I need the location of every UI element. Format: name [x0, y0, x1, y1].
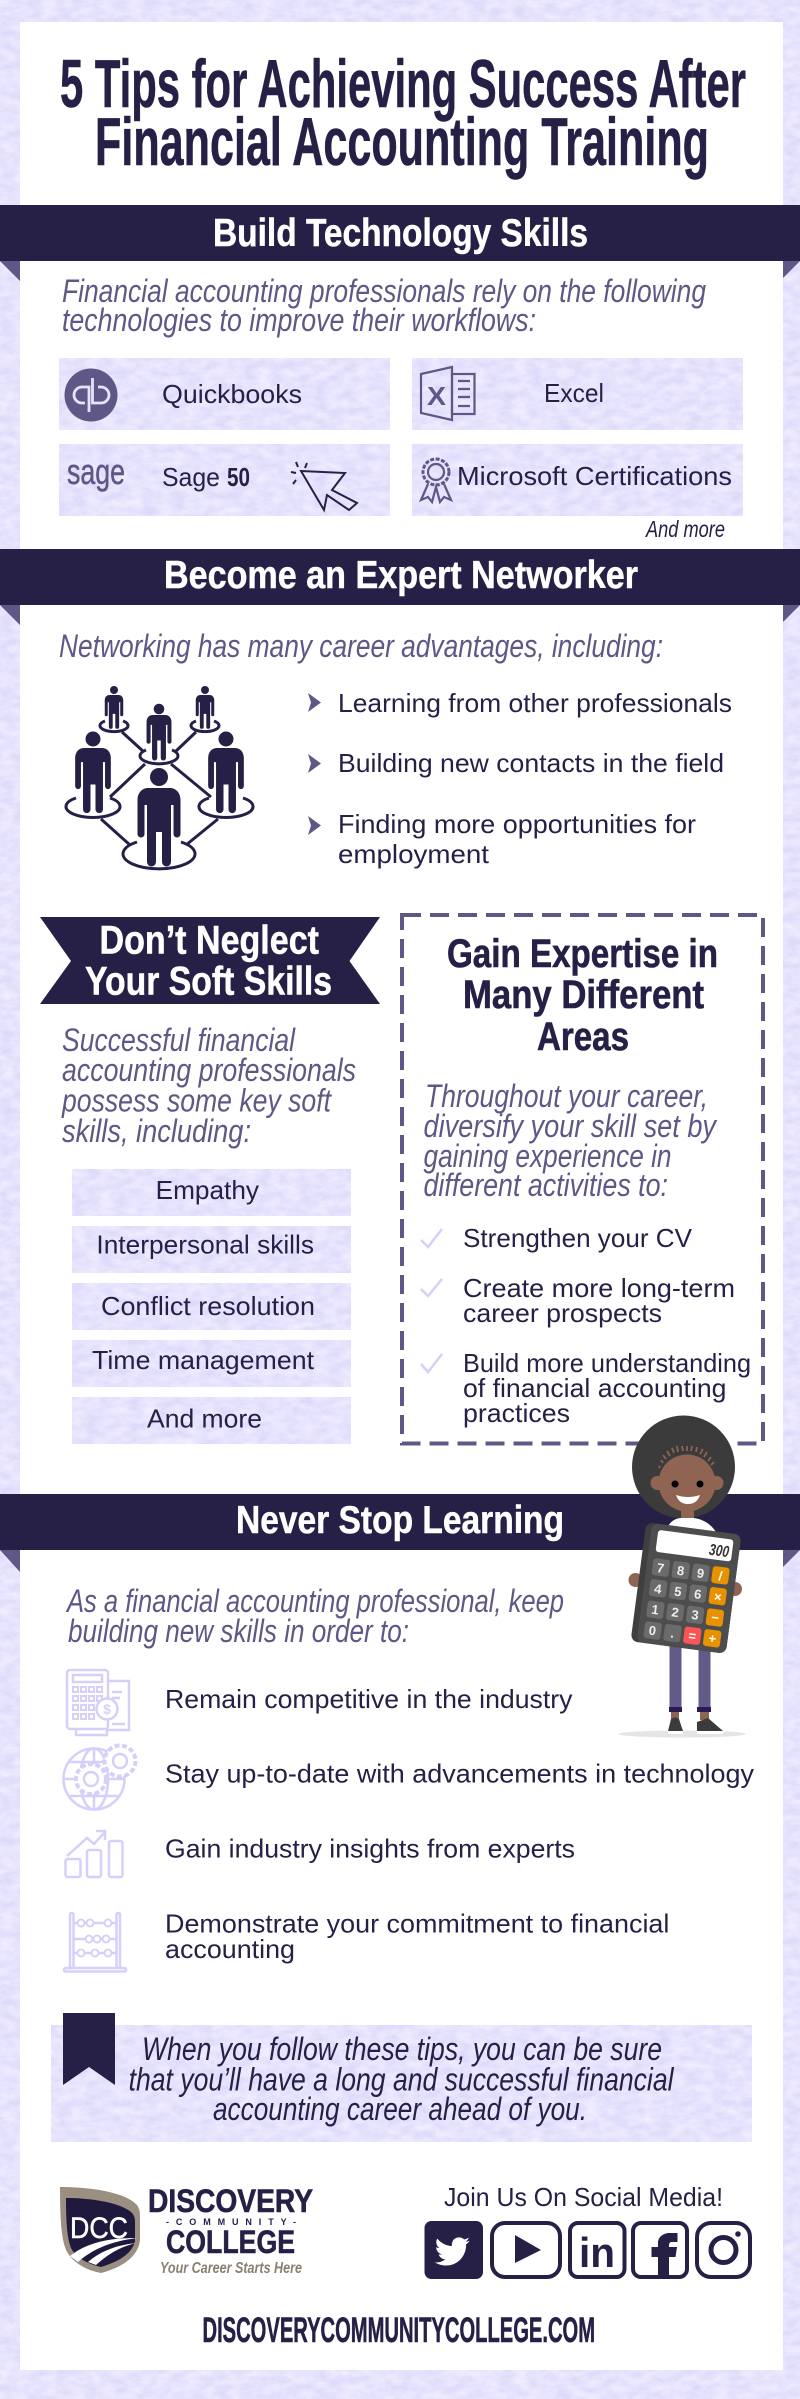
illustration: woman holding calculator: 8: [676, 1563, 685, 1579]
intro: technologies: [62, 273, 706, 338]
intro: soft skills: Successful financial: [62, 1022, 296, 1058]
soft skills chips: [72, 1169, 351, 1444]
card: Sage 50: Sage: [162, 462, 220, 492]
illustration: woman holding calculator: .: [670, 1625, 675, 1641]
text: demonstrate commitment: [165, 1908, 669, 1964]
intro: keep learning: building new skills in order to:: [68, 1613, 409, 1649]
intro: soft skills: possess some key soft: [61, 1082, 332, 1118]
illustration: woman holding calculator: 1: [651, 1602, 660, 1618]
intro: keep learning: [65, 1583, 564, 1649]
text: demonstrate commitment: Demonstrate your commitment to financial: [165, 1908, 669, 1938]
intro: keep learning: As a financial accounting professional, keep: [65, 1583, 564, 1619]
heading: expertise: Areas: [537, 1015, 629, 1059]
illustration: woman holding calculator: 4: [653, 1581, 663, 1597]
ribbon heading: soft skills: Don’t Neglect: [100, 918, 319, 962]
expertise checklist: practices: [463, 1398, 570, 1428]
card: Excel: [412, 358, 743, 430]
intro: expertise: gaining experience in: [424, 1138, 672, 1174]
intro: soft skills: [61, 1022, 356, 1149]
callout: conclusion: accounting career ahead of you.: [213, 2091, 587, 2127]
callout: conclusion: [51, 2013, 752, 2142]
text: remain competitive: Remain competitive in the industry: [165, 1684, 572, 1714]
soft skills chips: And more: [147, 1404, 262, 1434]
expertise checklist: career prospects: [463, 1298, 662, 1328]
illustration: woman holding calculator: +: [708, 1630, 717, 1646]
banner: Become an Expert Networker: Become an Expert Networker: [164, 554, 638, 597]
networking advantages list: employment: [338, 839, 490, 869]
networking advantages list: Learning from other professionals: [338, 688, 732, 718]
expertise checklist: Build more understanding: [463, 1348, 751, 1378]
dashed panel: expertise: [402, 915, 763, 1444]
heading: expertise: Gain Expertise in: [447, 932, 718, 976]
illustration: woman holding calculator: 9: [696, 1565, 705, 1581]
card: Quickbooks: [59, 358, 390, 430]
intro: expertise: [424, 1078, 718, 1203]
card: Sage 50: 50: [227, 462, 250, 492]
icon: instagram: [697, 2223, 750, 2277]
text: stay up to date: Stay up-to-date with advancements in technology: [165, 1758, 754, 1788]
soft skills chips: Time management: [92, 1345, 315, 1375]
networking advantages list: Building new contacts in the field: [338, 748, 724, 778]
ribbon heading: soft skills: Your Soft Skills: [85, 960, 332, 1004]
banner: Never Stop Learning: [0, 1494, 800, 1572]
logo: Discovery Community College: -COMMUNITY-: [166, 2217, 296, 2227]
callout: conclusion: that you’ll have a long and successful financial: [129, 2062, 674, 2098]
ribbon heading: soft skills: [40, 917, 380, 1004]
expertise checklist: of financial accounting: [463, 1373, 726, 1403]
card: Excel: Excel: [544, 378, 604, 408]
illustration: woman holding calculator: 7: [656, 1560, 665, 1576]
note: And more: And more: [644, 516, 725, 542]
banner: Become an Expert Networker: [0, 549, 800, 625]
icon: calculator and invoice: [67, 1670, 129, 1735]
intro: networking: Networking has many career advantages, including:: [59, 628, 663, 664]
networking advantages list: [308, 688, 732, 869]
logo: Discovery Community College: Your Career Starts Here: [160, 2260, 302, 2277]
expertise checklist: [421, 1223, 751, 1428]
text: gain insights: Gain industry insights from experts: [165, 1834, 575, 1864]
intro: soft skills: skills, including:: [62, 1113, 251, 1149]
logo: Discovery Community College: DISCOVERY: [148, 2183, 313, 2219]
illustration: woman holding calculator: /: [718, 1568, 724, 1584]
text: demonstrate commitment: accounting: [165, 1934, 295, 1964]
intro: technologies: technologies to improve their workflows:: [62, 302, 536, 338]
icon: calculator and invoice: $: [103, 1701, 111, 1717]
soft skills chips: Conflict resolution: [101, 1291, 315, 1321]
icon: facebook: [633, 2223, 687, 2278]
intro: expertise: different activities to:: [424, 1167, 668, 1203]
card: Sage 50: sage: [67, 451, 125, 492]
illustration: woman holding calculator: =: [688, 1628, 697, 1644]
illustration: woman holding calculator: 300: [708, 1542, 730, 1561]
icon: linkedin: [570, 2223, 624, 2277]
networking advantages list: Finding more opportunities for: [338, 809, 696, 839]
card: Microsoft Certifications: Microsoft Certifications: [457, 461, 732, 491]
card: Sage 50: [59, 444, 390, 516]
soft skills chips: Interpersonal skills: [96, 1230, 314, 1260]
expertise checklist: Create more long-term: [463, 1273, 735, 1303]
social icons: [424, 2221, 750, 2279]
illustration: woman holding calculator: 5: [673, 1584, 682, 1599]
logo: Discovery Community College: COLLEGE: [166, 2224, 295, 2260]
intro: expertise: diversify your skill set by: [424, 1108, 718, 1144]
icon: globe and gears: [64, 1746, 136, 1810]
social heading: Join Us On Social Media!: [444, 2182, 723, 2212]
icon: linkedin: in: [579, 2229, 615, 2276]
icon: twitter: [424, 2221, 483, 2279]
illustration: woman holding calculator: ×: [713, 1589, 723, 1605]
card: Excel: X: [427, 381, 447, 411]
title: [60, 46, 746, 180]
icon: people network: [66, 686, 253, 869]
banner: Build Technology Skills: Build Technology Skills: [213, 212, 588, 255]
illustration: woman holding calculator: 0: [648, 1623, 657, 1638]
icon: youtube: [492, 2223, 560, 2277]
card: Quickbooks: Quickbooks: [162, 379, 302, 409]
logo: Discovery Community College: DCC: [70, 2212, 128, 2245]
icon: bookmark: [63, 2013, 115, 2085]
heading: expertise: Many Different: [463, 973, 704, 1017]
banner: Build Technology Skills: [0, 205, 800, 281]
illustration: woman holding calculator: 2: [671, 1604, 680, 1620]
card: Microsoft Certifications: [412, 444, 743, 516]
soft skills chips: Empathy: [156, 1175, 259, 1205]
expertise checklist: Strengthen your CV: [463, 1223, 693, 1253]
icon: abacus: [64, 1913, 126, 1972]
banner: Never Stop Learning: Never Stop Learning: [236, 1499, 564, 1542]
intro: soft skills: accounting professionals: [62, 1052, 356, 1088]
illustration: woman holding calculator: [618, 1416, 746, 1738]
callout: conclusion: When you follow these tips, you can be sure: [142, 2031, 662, 2067]
icon: growth chart: [66, 1831, 122, 1877]
heading: expertise: [447, 932, 718, 1059]
logo: Discovery Community College: [60, 2183, 313, 2277]
intro: expertise: Throughout your career,: [425, 1078, 708, 1114]
illustration: woman holding calculator: 6: [693, 1586, 702, 1602]
illustration: woman holding calculator: 3: [690, 1607, 700, 1623]
illustration: woman holding calculator: −: [710, 1610, 720, 1626]
